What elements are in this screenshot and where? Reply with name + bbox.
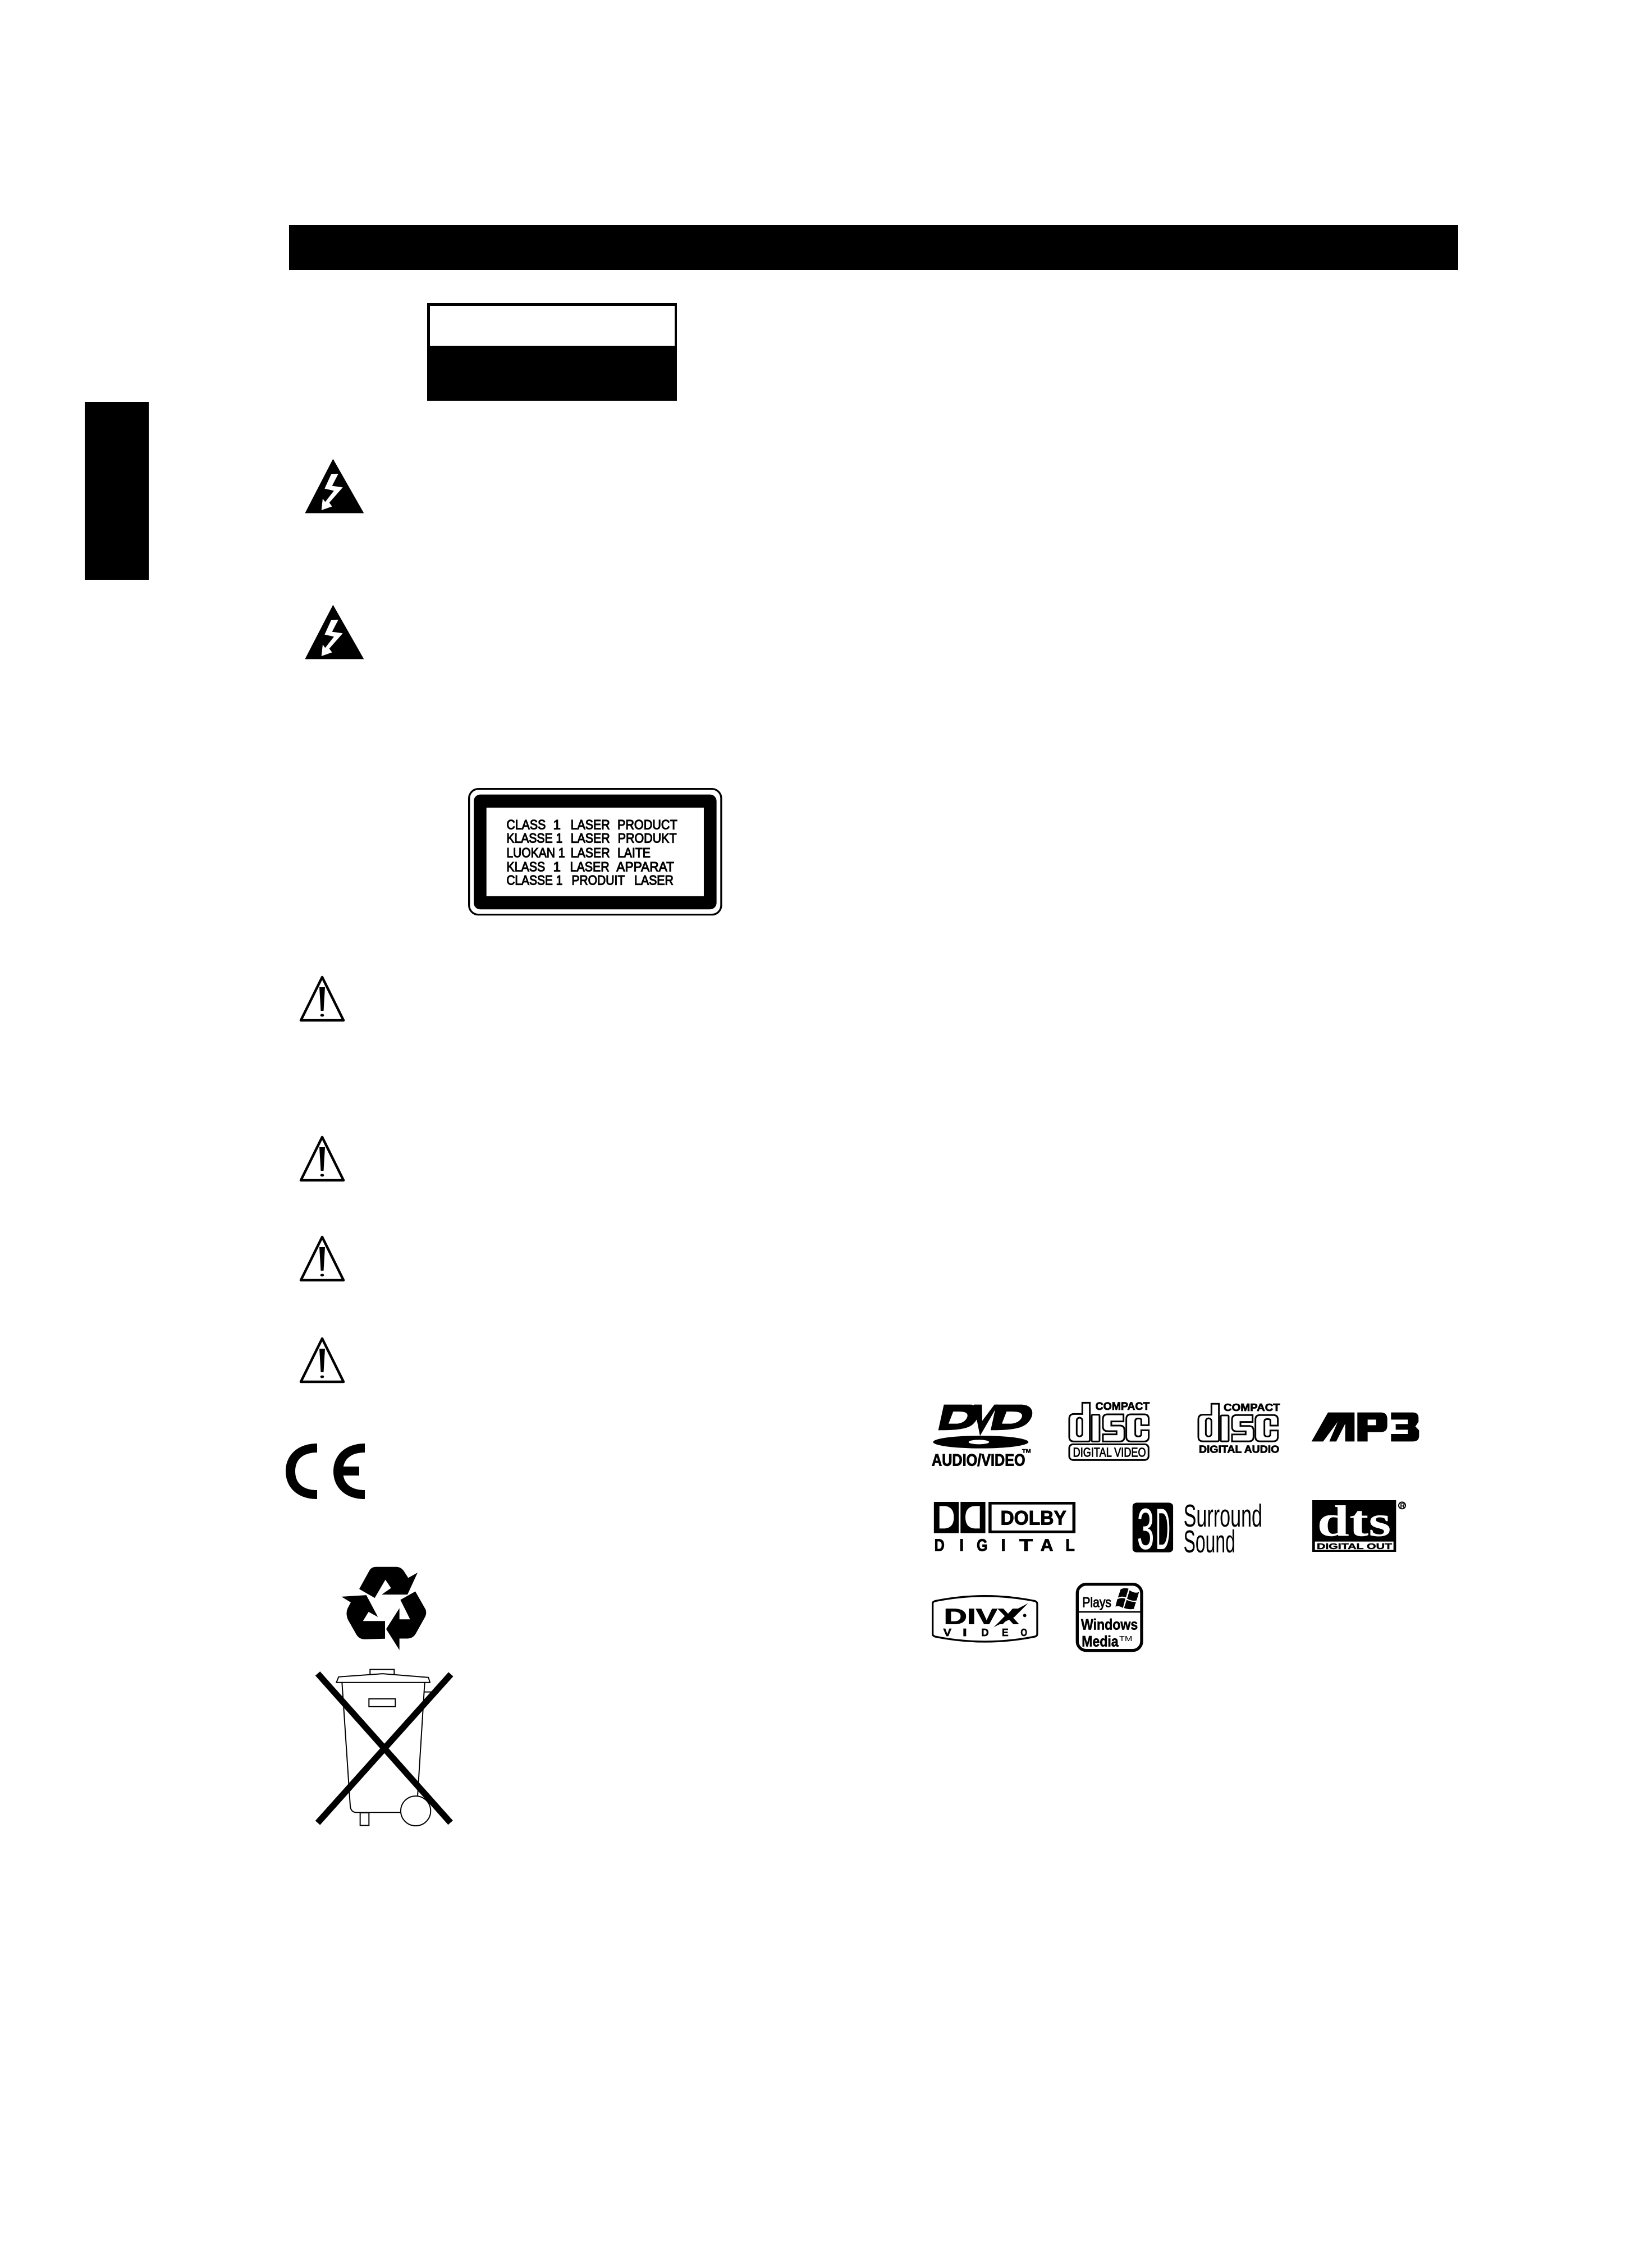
class 1 laser product label: LASER: [634, 873, 674, 888]
logo: DVD audio/video: TM: [1022, 1449, 1031, 1454]
logo: 3D Surround Sound: D: [1156, 1497, 1170, 1562]
side language tab: [85, 402, 149, 580]
logo: DivX video: O: [1020, 1626, 1027, 1638]
logo: Dolby Digital: L: [1065, 1536, 1075, 1555]
icon: electric shock warning triangle 1: [305, 459, 364, 513]
logo: Plays Windows Media: [1077, 1584, 1142, 1651]
class 1 laser product label: PRODUIT: [571, 873, 625, 888]
logo: DivX video: E: [1002, 1626, 1009, 1638]
logo: DVD audio/video: AUDIO/VIDEO: [932, 1451, 1025, 1470]
class 1 laser product label: LASER: [571, 817, 610, 832]
icon: electric shock warning triangle 2: [305, 605, 364, 659]
class 1 laser product label: 1: [553, 859, 561, 874]
class 1 laser product label: [469, 789, 721, 915]
logo: Dolby Digital: G: [977, 1536, 988, 1555]
class 1 laser product label: KLASS: [506, 859, 545, 874]
logo: compact disc digital video: COMPACT: [1096, 1401, 1150, 1413]
class 1 laser product label: CLASSE 1: [506, 873, 562, 888]
logo: Dolby Digital: A: [1041, 1536, 1054, 1555]
class 1 laser product label: APPARAT: [616, 859, 674, 874]
logo: Plays Windows Media: Media: [1082, 1633, 1119, 1650]
logo: dts digital out: DIGITAL OUT: [1317, 1542, 1392, 1551]
logo: dts digital out: dts: [1317, 1497, 1391, 1546]
logo: DivX video: D: [981, 1626, 989, 1638]
class 1 laser product label: LASER: [571, 845, 610, 860]
logo: DivX video: V: [944, 1626, 952, 1638]
logo: Dolby Digital: D: [935, 1536, 945, 1555]
icon: caution triangle 2: [301, 1137, 344, 1180]
caution box: [427, 303, 677, 401]
class 1 laser product label: LUOKAN 1: [506, 845, 565, 860]
logo: compact disc digital audio: [1198, 1401, 1280, 1455]
logo: 3D Surround Sound: [1133, 1497, 1262, 1562]
logo: Plays Windows Media: Windows: [1081, 1616, 1138, 1633]
class 1 laser product label: KLASSE 1: [506, 831, 562, 846]
logo: compact disc digital video: DIGITAL VIDEO: [1073, 1445, 1146, 1459]
class 1 laser product label: PRODUKT: [618, 831, 677, 846]
logo: dts digital out: [1312, 1497, 1405, 1552]
logo: DivX video: [933, 1596, 1037, 1642]
logo: Dolby Digital: I: [1001, 1536, 1006, 1555]
class 1 laser product label: LASER: [570, 859, 610, 874]
logo: compact disc digital audio: DIGITAL AUDIO: [1199, 1443, 1279, 1455]
logo: 3D Surround Sound: Sound: [1184, 1524, 1235, 1560]
header bar: [289, 225, 1458, 270]
logo: DivX video: DIVX: [944, 1604, 1019, 1629]
class 1 laser product label: LAITE: [617, 845, 651, 860]
logo: DivX video: I: [963, 1626, 967, 1638]
icon: caution triangle 3: [301, 1237, 344, 1280]
logo: MP3: [1312, 1413, 1419, 1441]
logo: dts digital out: R: [1400, 1502, 1405, 1510]
logo: Plays Windows Media: TM: [1119, 1635, 1132, 1643]
class 1 laser product label: PRODUCT: [617, 817, 677, 832]
class 1 laser product label: LASER: [571, 831, 610, 846]
class 1 laser product label: 1: [553, 817, 561, 832]
logo: compact disc digital audio: COMPACT: [1224, 1401, 1280, 1413]
logo: Plays Windows Media: Plays: [1082, 1595, 1111, 1610]
icon: crossed-out wheelie bin: [318, 1670, 451, 1826]
logo: compact disc digital video: [1069, 1401, 1150, 1460]
logo: 3D Surround Sound: 3: [1137, 1497, 1154, 1562]
class 1 laser product label: CLASS: [506, 817, 546, 832]
logo: DVD audio/video: [932, 1405, 1032, 1470]
icon: caution triangle 1: [301, 977, 344, 1020]
logo: Dolby Digital: [934, 1502, 1075, 1555]
logo: Dolby Digital: T: [1019, 1536, 1033, 1555]
icon: caution triangle 4: [301, 1339, 344, 1382]
logo: Dolby Digital: I: [959, 1536, 964, 1555]
logo: 3D Surround Sound: Surround: [1184, 1499, 1262, 1534]
icon: CE mark: [286, 1444, 365, 1499]
logo: Dolby Digital: DOLBY: [1000, 1508, 1066, 1529]
icon: recycling symbol: [341, 1567, 426, 1650]
